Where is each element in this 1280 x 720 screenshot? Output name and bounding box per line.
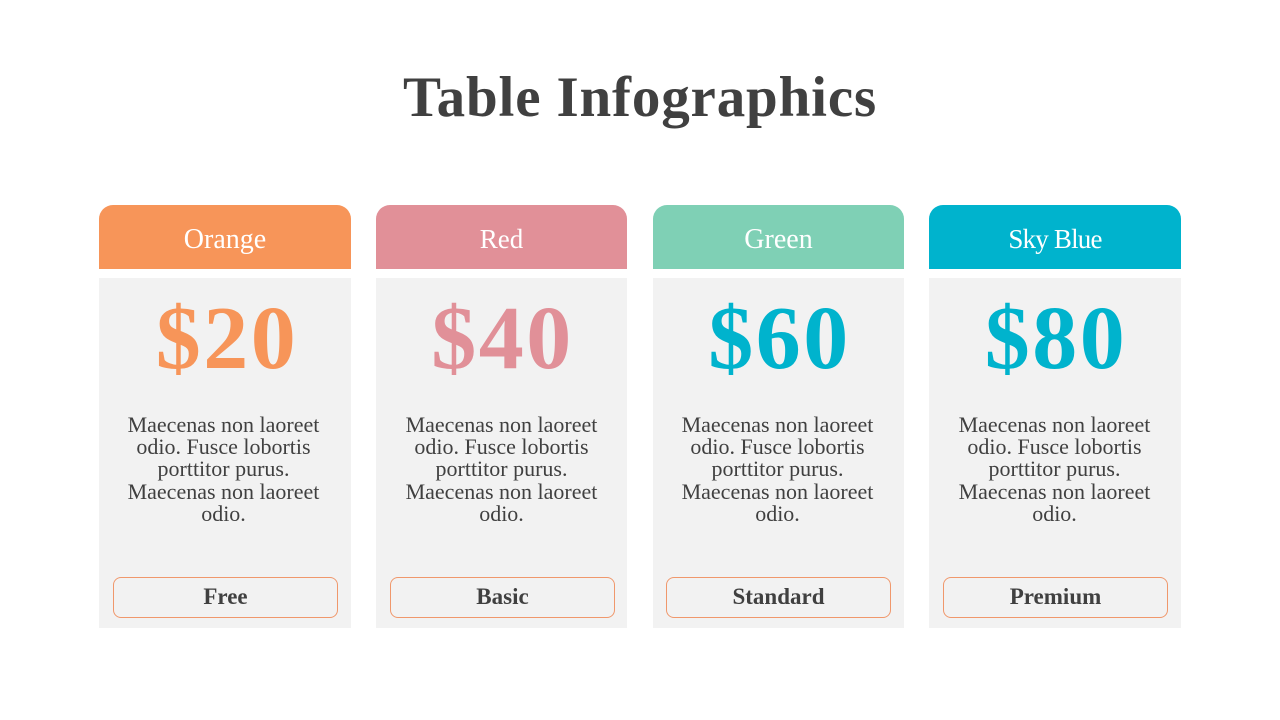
description text: [406, 412, 598, 526]
description text: [959, 412, 1150, 526]
panel: red plan: [376, 205, 627, 628]
description text: Maecenas non laoreet: [128, 479, 319, 504]
header: Orange: [99, 205, 351, 269]
description text: odio.: [479, 501, 524, 526]
button: Premium: Premium: [1010, 584, 1101, 609]
panel: orange plan: [99, 205, 351, 628]
description text: odio. Fusce lobortis: [967, 434, 1142, 459]
description text: Maecenas non laoreet: [406, 479, 597, 504]
card body background: [376, 278, 627, 628]
price: $20: $20: [156, 289, 298, 388]
panel: green plan: [653, 205, 904, 628]
button: Premium: [943, 577, 1168, 618]
button: Basic: Basic: [476, 584, 529, 609]
description text: odio. Fusce lobortis: [690, 434, 865, 459]
description text: porttitor purus.: [712, 456, 844, 481]
description text: porttitor purus.: [436, 456, 568, 481]
header: Sky Blue: [929, 205, 1181, 269]
button: Standard: Standard: [732, 584, 825, 609]
header: Green: [653, 205, 904, 269]
card body background: [99, 278, 351, 628]
description text: Maecenas non laoreet: [682, 412, 873, 437]
button: Basic: [390, 577, 615, 618]
price: $60: $60: [708, 289, 851, 388]
header: Red: Red: [480, 224, 523, 254]
price: $40: $40: [431, 289, 574, 388]
description text: porttitor purus.: [158, 456, 290, 481]
description text: Maecenas non laoreet: [682, 479, 873, 504]
button: Standard: [666, 577, 891, 618]
title: Table Infographics: [403, 66, 877, 129]
button: Free: Free: [203, 584, 248, 609]
description text: Maecenas non laoreet: [128, 412, 319, 437]
description text: Maecenas non laoreet: [959, 479, 1150, 504]
description text: Maecenas non laoreet: [959, 412, 1150, 437]
description text: Maecenas non laoreet: [406, 412, 597, 437]
description text: [128, 412, 320, 526]
header: Green: Green: [744, 224, 813, 255]
description text: odio. Fusce lobortis: [136, 434, 311, 459]
panel: sky blue plan: [929, 205, 1181, 628]
description text: odio.: [1032, 501, 1077, 526]
card body background: [653, 278, 904, 628]
description text: [682, 412, 874, 526]
description text: odio. Fusce lobortis: [414, 434, 589, 459]
card body background: [929, 278, 1181, 628]
description text: odio.: [201, 501, 246, 526]
button: Free: [113, 577, 338, 618]
header: Red: [376, 205, 627, 269]
description text: porttitor purus.: [988, 456, 1120, 481]
header: Orange: Orange: [184, 224, 266, 255]
price: $80: $80: [985, 289, 1127, 388]
header: Sky Blue: Sky Blue: [1008, 224, 1102, 254]
description text: odio.: [755, 501, 800, 526]
